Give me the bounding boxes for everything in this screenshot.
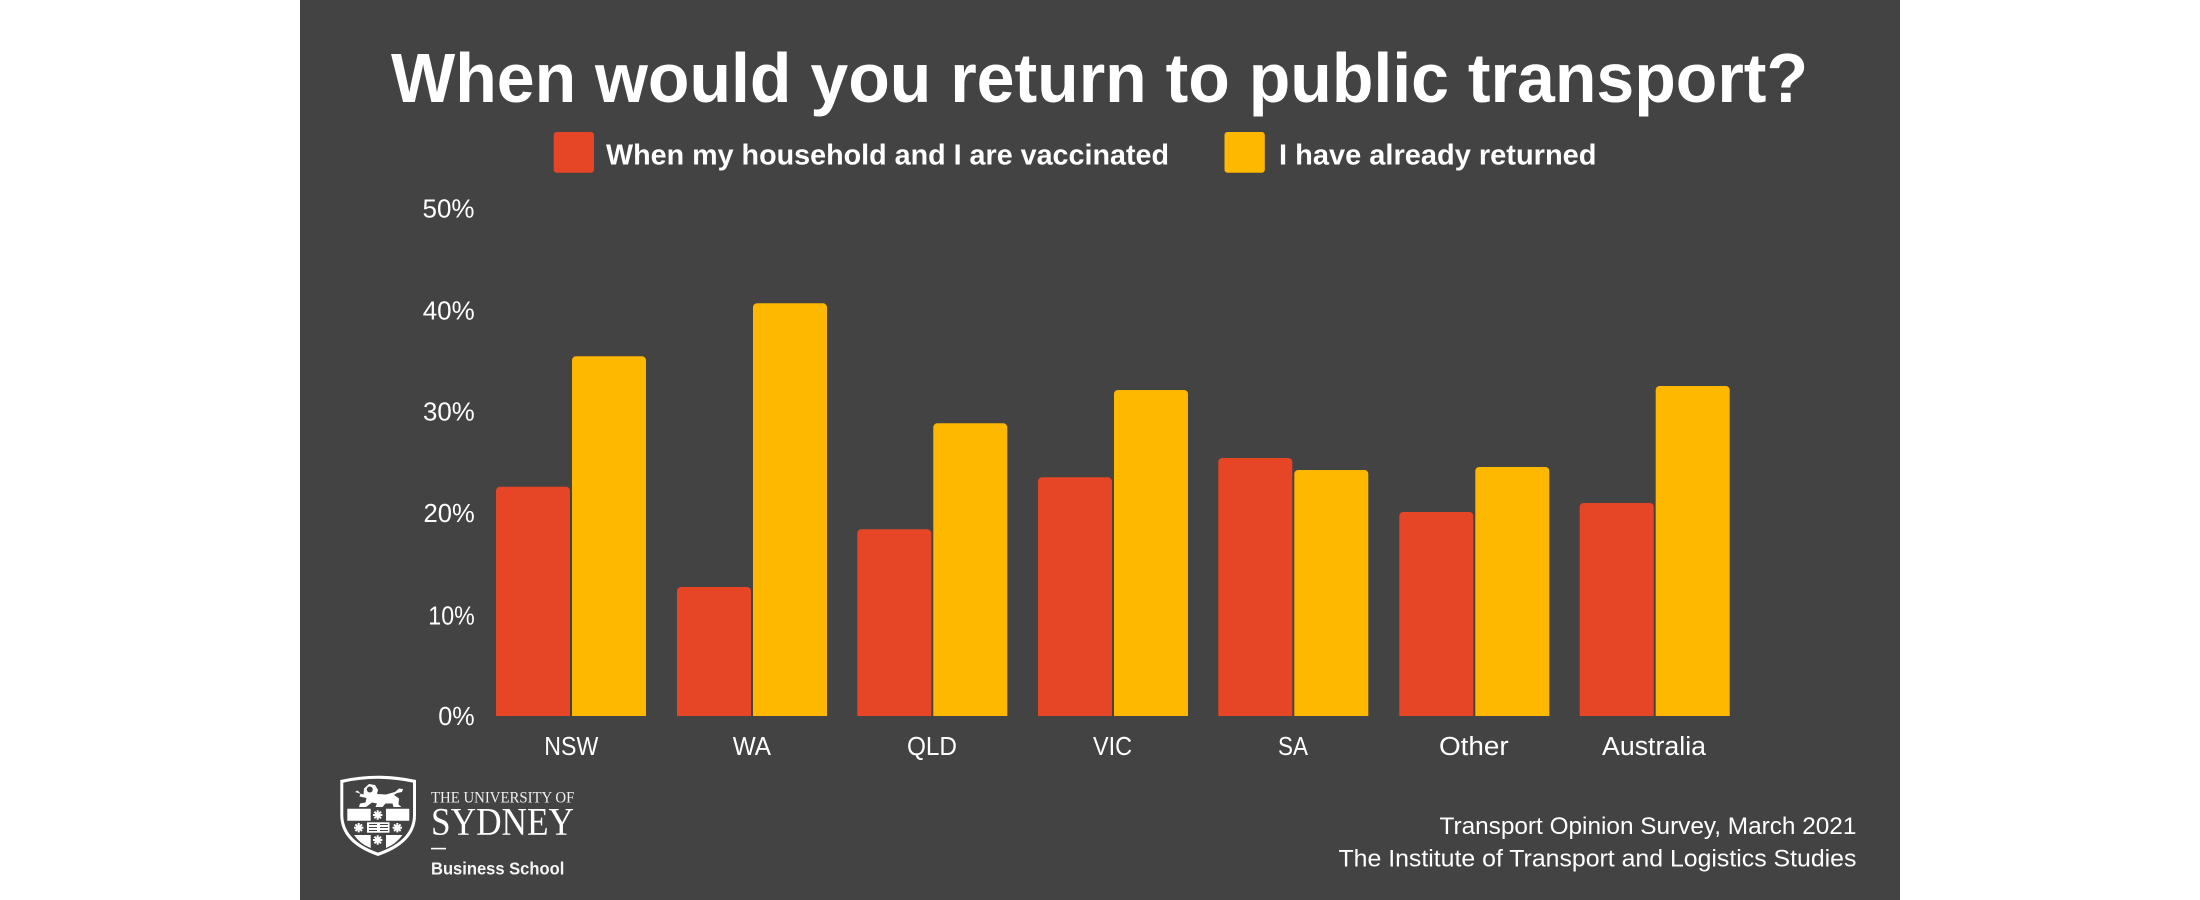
y axis labels <box>422 194 475 731</box>
x axis labels: Australia <box>1602 733 1707 761</box>
y axis labels: 30% <box>423 396 475 426</box>
logo dash <box>431 848 446 849</box>
x axis labels: NSW <box>544 733 598 761</box>
legend swatch: vaccinated <box>554 132 594 173</box>
x axis labels: Other <box>1439 733 1509 761</box>
source line 2: The Institute of Transport and Logistics Studies <box>1338 846 1856 873</box>
y axis labels: 20% <box>424 498 475 528</box>
legend label: vaccinated: When my household and I are vaccinated <box>606 140 1169 172</box>
y axis labels: 0% <box>438 701 475 731</box>
logo text: Sydney: SYDNEY <box>431 801 574 844</box>
bars: VIC <box>1038 390 1188 716</box>
legend label: already returned: I have already returned <box>1279 140 1596 172</box>
y axis labels: 50% <box>422 194 474 224</box>
logo text: Business School: Business School <box>431 858 564 878</box>
legend swatch: already returned <box>1224 132 1265 173</box>
logo: University of Sydney Business School <box>340 776 574 878</box>
bars: SA <box>1218 458 1368 716</box>
y axis labels: 10% <box>428 600 475 630</box>
logo text: the university of: THE UNIVERSITY OF <box>431 790 574 807</box>
x axis labels: VIC <box>1093 733 1132 761</box>
x axis labels: QLD <box>907 733 957 761</box>
source note <box>1338 813 1856 873</box>
bar chart <box>422 194 1730 761</box>
x axis labels: SA <box>1278 733 1308 761</box>
bars: Australia <box>1580 386 1730 716</box>
x axis labels <box>544 733 1707 761</box>
x axis labels: WA <box>733 733 771 761</box>
icon: university shield crest <box>340 776 416 856</box>
panel: dark background <box>300 0 1900 900</box>
source line 1: Transport Opinion Survey, March 2021 <box>1440 813 1856 840</box>
bars: Other <box>1399 467 1549 716</box>
bars: QLD <box>857 423 1007 716</box>
legend <box>554 132 1597 173</box>
y axis labels: 40% <box>423 296 475 326</box>
bars: WA <box>677 303 827 716</box>
title: When would you return to public transport? <box>391 39 1808 117</box>
bars: NSW <box>496 356 646 716</box>
